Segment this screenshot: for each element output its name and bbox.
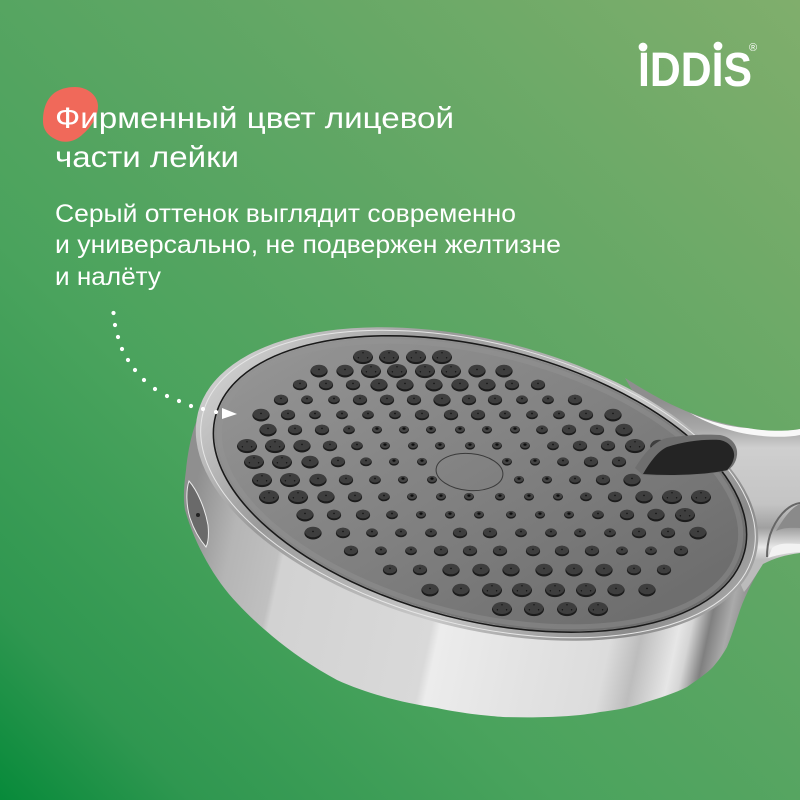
- body text: и универсально, не подвержен желтизне: [55, 231, 561, 259]
- body text: Серый оттенок выглядит современно: [55, 200, 516, 228]
- shower head illustration: [162, 273, 800, 717]
- nozzles: [237, 350, 711, 616]
- heading: части лейки: [55, 141, 239, 174]
- callout: dotted arrow: [111, 311, 237, 419]
- grey face: [183, 286, 777, 682]
- head body: [184, 400, 763, 717]
- centre button: [435, 451, 504, 493]
- heading: [55, 102, 454, 174]
- mode switch lever: [635, 435, 737, 476]
- body text: [55, 200, 561, 291]
- chrome rim: [162, 273, 792, 695]
- logo: IDDIS: ®: [749, 42, 757, 54]
- black gap ring: [182, 284, 778, 684]
- side slot: [187, 481, 208, 547]
- logo: IDDIS: IDDIS: [638, 44, 752, 97]
- accent blob behind heading: [43, 87, 98, 142]
- body text: и налёту: [55, 263, 162, 291]
- heading: Фирменный цвет лицевой: [55, 102, 454, 135]
- handle: [625, 378, 800, 592]
